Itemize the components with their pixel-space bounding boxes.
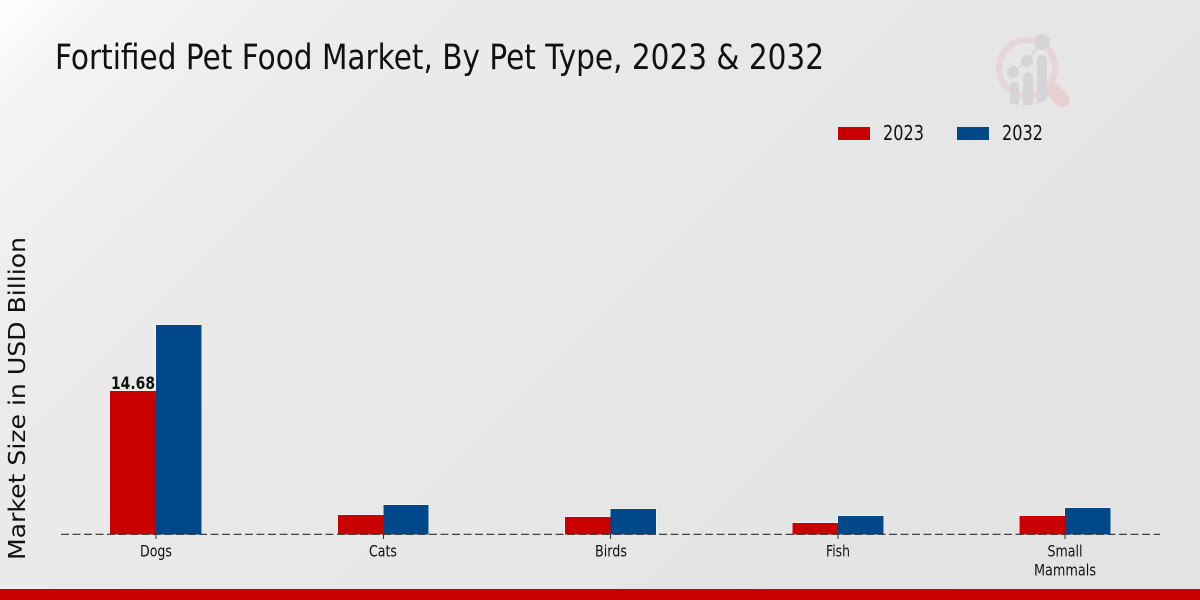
title: Fortified Pet Food Market, By Pet Type, 2023 & 2032	[55, 38, 824, 78]
baseline	[61, 533, 1160, 535]
category label: Dogs: Dogs	[140, 542, 172, 560]
legend: 2032: 2032	[1002, 121, 1043, 145]
tick marks	[156, 534, 1065, 539]
bar chart	[61, 325, 1160, 580]
category label: Cats: Cats	[369, 542, 397, 560]
category label: Fish: Fish	[826, 542, 850, 560]
legend: 2032	[957, 121, 1043, 145]
data label: 14.68	[111, 374, 155, 393]
icon: logo magnifier with bars	[999, 34, 1062, 105]
bars: Fish	[792, 516, 884, 534]
bars: Small Mammals	[1020, 508, 1110, 534]
legend: 2023: 2023	[883, 121, 924, 145]
y axis label: Market Size in USD Billion	[5, 237, 31, 560]
footer bar	[0, 589, 1200, 600]
category label: Small Mammals: Mammals	[1034, 560, 1096, 580]
category label: Small Mammals: Small	[1048, 542, 1082, 560]
bars: Dogs	[110, 325, 202, 534]
legend	[838, 121, 1043, 145]
bars: Cats	[338, 505, 428, 534]
bars: Birds	[565, 509, 656, 534]
category label: Birds: Birds	[595, 542, 627, 560]
legend: 2023	[838, 121, 924, 145]
category label: Small Mammals	[1034, 542, 1096, 580]
